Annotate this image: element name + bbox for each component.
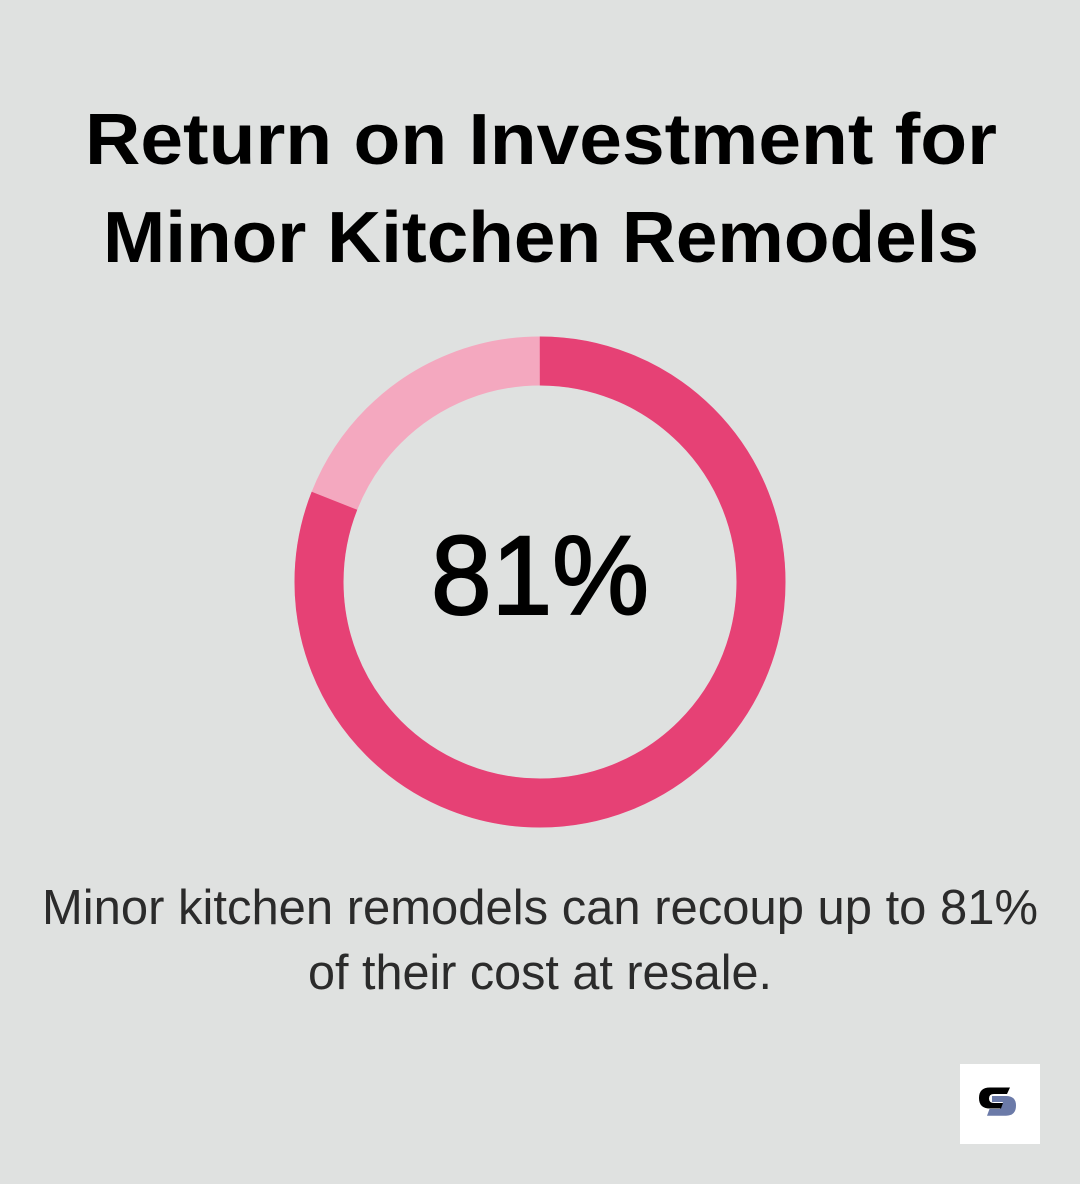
donut chart: 81% (319, 361, 761, 803)
description text: Minor kitchen remodels can recoup up to 81% (42, 881, 1038, 935)
title: Return on Investment for (85, 100, 997, 180)
logo badge (960, 1064, 1040, 1144)
title: Minor Kitchen Remodels (103, 198, 979, 278)
icon: logo mark (979, 1088, 1016, 1116)
donut center value: 81% (431, 513, 649, 638)
description text (42, 881, 1038, 1000)
description text: of their cost at resale. (308, 946, 772, 1000)
title (85, 100, 997, 278)
